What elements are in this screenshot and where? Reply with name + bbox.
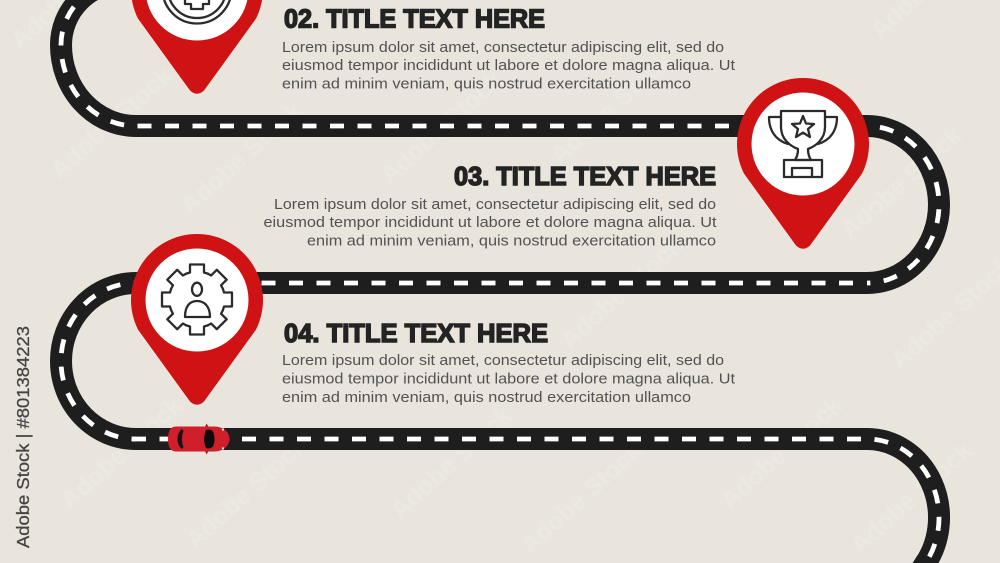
step 02 description xyxy=(282,40,735,92)
watermark pattern: Adobe Stock xyxy=(180,431,313,554)
step 02 location pin xyxy=(131,0,263,94)
step 03 description xyxy=(264,197,716,250)
step 02 description: Lorem ipsum dolor sit amet, consectetur adipiscing elit, sed do xyxy=(282,40,724,56)
step 03 description: eiusmod tempor incididunt ut labore et dolore magna aliqua. Ut xyxy=(264,215,716,231)
vertical stock id: Adobe Stock | #801384223 xyxy=(13,326,33,548)
watermark pattern: Adobe Stock xyxy=(385,401,518,524)
icon: trophy xyxy=(769,111,837,177)
red car xyxy=(168,424,230,454)
step 02 description: eiusmod tempor incididunt ut labore et dolore magna aliqua. Ut xyxy=(282,58,735,74)
icon: medal with cross xyxy=(162,0,232,24)
watermark pattern: Adobe Stock xyxy=(375,66,508,189)
step 03 description: Lorem ipsum dolor sit amet, consectetur adipiscing elit, sed do xyxy=(274,197,716,213)
step 02 title: 02. TITLE TEXT HERE xyxy=(284,4,545,34)
watermark pattern: Adobe Stock xyxy=(515,436,648,559)
step 04 location pin xyxy=(131,234,263,405)
step 04 description xyxy=(282,353,735,406)
watermark pattern: Adobe Stock xyxy=(175,96,308,219)
icon: gear with person xyxy=(162,264,232,334)
watermark pattern: Adobe Stock xyxy=(555,231,688,354)
watermark pattern: Adobe Stock xyxy=(715,391,848,514)
watermark pattern: Adobe Stock xyxy=(845,436,978,559)
step 03 description: enim ad minim veniam, quis nostrud exercitation ullamco xyxy=(307,234,716,250)
watermark pattern: Adobe Stock xyxy=(55,391,188,514)
step 04 description: eiusmod tempor incididunt ut labore et dolore magna aliqua. Ut xyxy=(282,372,735,388)
step 03 title: 03. TITLE TEXT HERE xyxy=(454,161,716,191)
step 04 title: 04. TITLE TEXT HERE xyxy=(284,318,548,348)
step 03 location pin xyxy=(737,78,869,249)
watermark pattern: Adobe Stock xyxy=(45,61,178,184)
step 04 description: enim ad minim veniam, quis nostrud exercitation ullamco xyxy=(282,390,691,406)
step 04 description: Lorem ipsum dolor sit amet, consectetur adipiscing elit, sed do xyxy=(282,353,724,369)
watermark pattern: Adobe Stock xyxy=(545,46,678,169)
step 02 description: enim ad minim veniam, quis nostrud exercitation ullamco xyxy=(282,76,691,92)
watermark pattern: Adobe Stock xyxy=(835,121,968,244)
